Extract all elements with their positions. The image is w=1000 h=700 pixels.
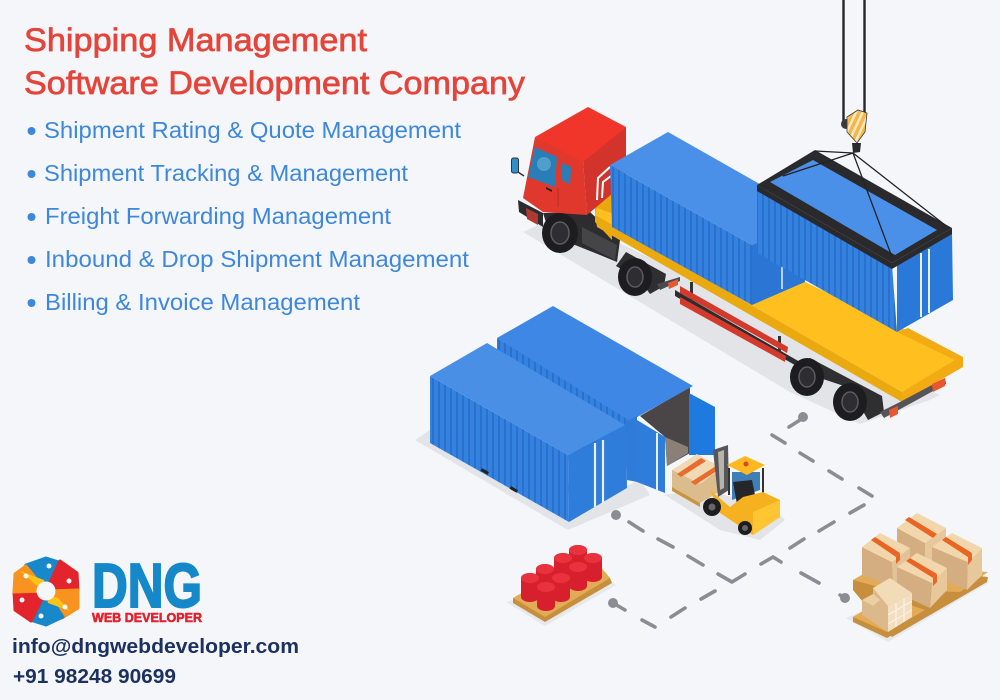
route markers [608,412,850,608]
box left [862,547,893,587]
container on truck [610,132,805,305]
stacked cardboard boxes on pallets [846,513,990,642]
logo mark [14,558,78,625]
feature list: Shipment Tracking & Management [44,160,409,186]
back shipping container [497,306,715,493]
title: Software Development Company [24,65,525,101]
logo wordmark: WEB DEVELOPER [92,610,203,625]
truck rear wheels and fenders [616,252,946,421]
truck shadow [523,215,940,424]
feature list [28,117,470,315]
contact details: info@dngwebdeveloper.com [12,635,299,658]
upper pallet [853,565,988,637]
logo wordmark: DNG [92,552,202,621]
crane cables [844,0,864,122]
pallet boxes [672,454,722,507]
feature list: Shipment Rating & Quote Management [44,117,462,143]
truck trailer bed [595,192,963,402]
contact details [12,635,299,688]
small box stack [862,578,912,632]
truck side guard rails [680,282,788,362]
lower pallet [853,597,935,638]
barrels on pallet [506,545,616,626]
feature list: Inbound & Drop Shipment Management [45,246,470,272]
title [24,22,525,101]
hanging container [757,150,953,332]
flatbed truck [512,107,963,421]
ground container shadow [415,430,650,530]
contact details: +91 98248 90699 [13,665,176,688]
truck cab [512,107,626,253]
box front [897,567,932,608]
forklift body [703,445,780,535]
box right [932,547,968,590]
title: Shipping Management [24,22,367,58]
truck chassis [543,212,800,368]
crane hook [841,110,867,153]
dashed route [613,420,872,627]
front shipping container [430,343,627,522]
forklift with boxes [665,445,785,540]
feature list: Freight Forwarding Management [45,203,392,229]
box back [897,528,925,578]
feature list: Billing & Invoice Management [45,289,361,315]
